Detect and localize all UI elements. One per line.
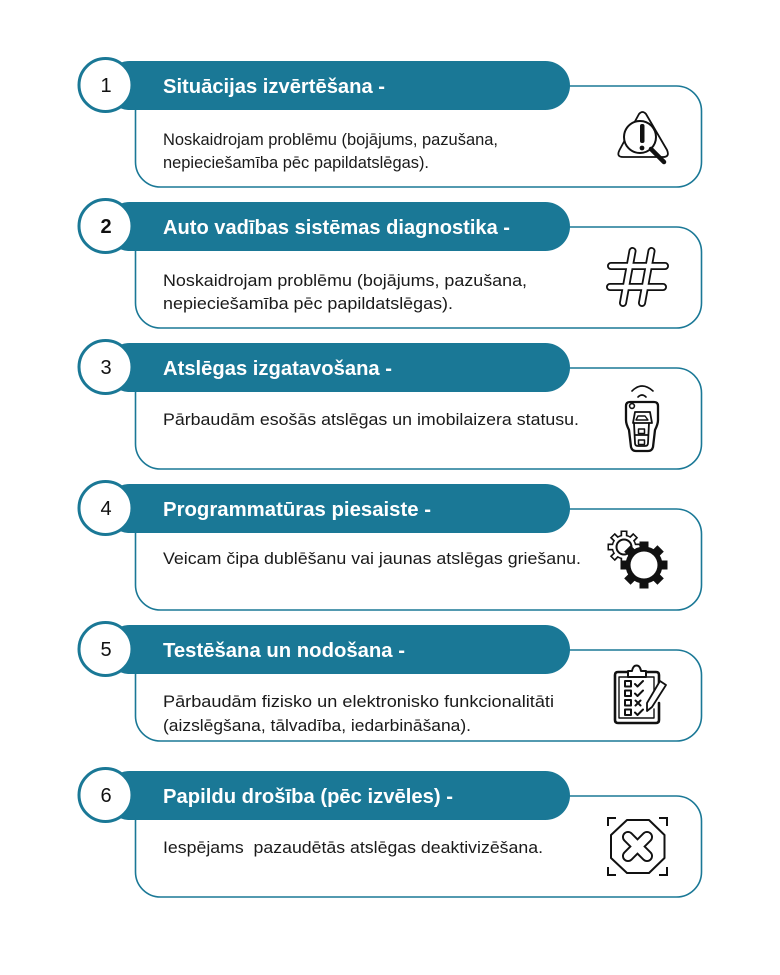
header bar 3 — [105, 343, 570, 392]
icon: car key fob — [626, 386, 658, 451]
number badge 1: 1 — [100, 75, 112, 97]
number badge 3: 3 — [100, 357, 112, 379]
heading 4: Programmatūras piesaiste - — [163, 499, 431, 521]
number badge 5: 5 — [100, 639, 112, 661]
number badge 6: 6 — [100, 785, 112, 807]
card 5 — [136, 650, 702, 741]
number badge 6 — [79, 768, 132, 822]
header bar 1 — [105, 61, 570, 110]
description 5: (aizslēgšana, tālvadība, iedarbināšana). — [163, 717, 471, 735]
header bar 6 — [105, 771, 570, 820]
description 1: Noskaidrojam problēmu (bojājums, pazušana, — [163, 131, 498, 149]
step 1 panel — [79, 58, 702, 187]
icon: octagon cross — [608, 818, 667, 875]
icon: clipboard checklist — [615, 666, 666, 723]
header bar 4 — [105, 484, 570, 533]
number badge 4 — [79, 482, 132, 534]
card 3 — [136, 368, 702, 469]
card 2 — [136, 227, 702, 328]
description 5: Pārbaudām fizisko un elektronisko funkcionalitāti — [163, 693, 554, 711]
step 6 panel — [79, 768, 702, 897]
icon: hash — [610, 251, 665, 303]
number badge 4: 4 — [100, 498, 112, 520]
step 5 panel — [79, 622, 702, 741]
card 6 — [136, 796, 702, 897]
step 3 panel — [79, 340, 702, 469]
description 2: nepieciešamība pēc papildatslēgas). — [163, 295, 453, 313]
description 5 — [163, 693, 554, 735]
number badge 3 — [79, 340, 132, 394]
description 2 — [163, 272, 527, 313]
description 1: nepieciešamība pēc papildatslēgas). — [163, 154, 429, 172]
heading 5: Testēšana un nodošana - — [163, 640, 405, 662]
header bar 5 — [105, 625, 570, 674]
heading 6: Papildu drošība (pēc izvēles) - — [163, 786, 453, 808]
heading 3: Atslēgas izgatavošana - — [163, 358, 392, 380]
heading 2: Auto vadības sistēmas diagnostika - — [163, 217, 510, 239]
icon: gears — [608, 530, 668, 588]
step 4 panel — [79, 482, 702, 610]
number badge 2 — [79, 200, 132, 252]
card 1 — [136, 86, 702, 187]
number badge 2: 2 — [100, 216, 112, 238]
icon: warning magnifier — [618, 112, 668, 162]
description 4: Veicam čipa dublēšanu vai jaunas atslēgas griešanu. — [163, 550, 581, 568]
card 4 — [136, 509, 702, 610]
description 3: Pārbaudām esošās atslēgas un imobilaizera statusu. — [163, 411, 579, 429]
number badge 1 — [79, 58, 132, 112]
description 6: Iespējams pazaudētās atslēgas deaktivizēšana. — [163, 839, 543, 857]
heading 1: Situācijas izvērtēšana - — [163, 76, 385, 98]
number badge 5 — [79, 622, 132, 676]
step 2 panel — [79, 200, 702, 328]
description 1 — [163, 131, 498, 172]
description 2: Noskaidrojam problēmu (bojājums, pazušana, — [163, 272, 527, 290]
header bar 2 — [105, 202, 570, 251]
